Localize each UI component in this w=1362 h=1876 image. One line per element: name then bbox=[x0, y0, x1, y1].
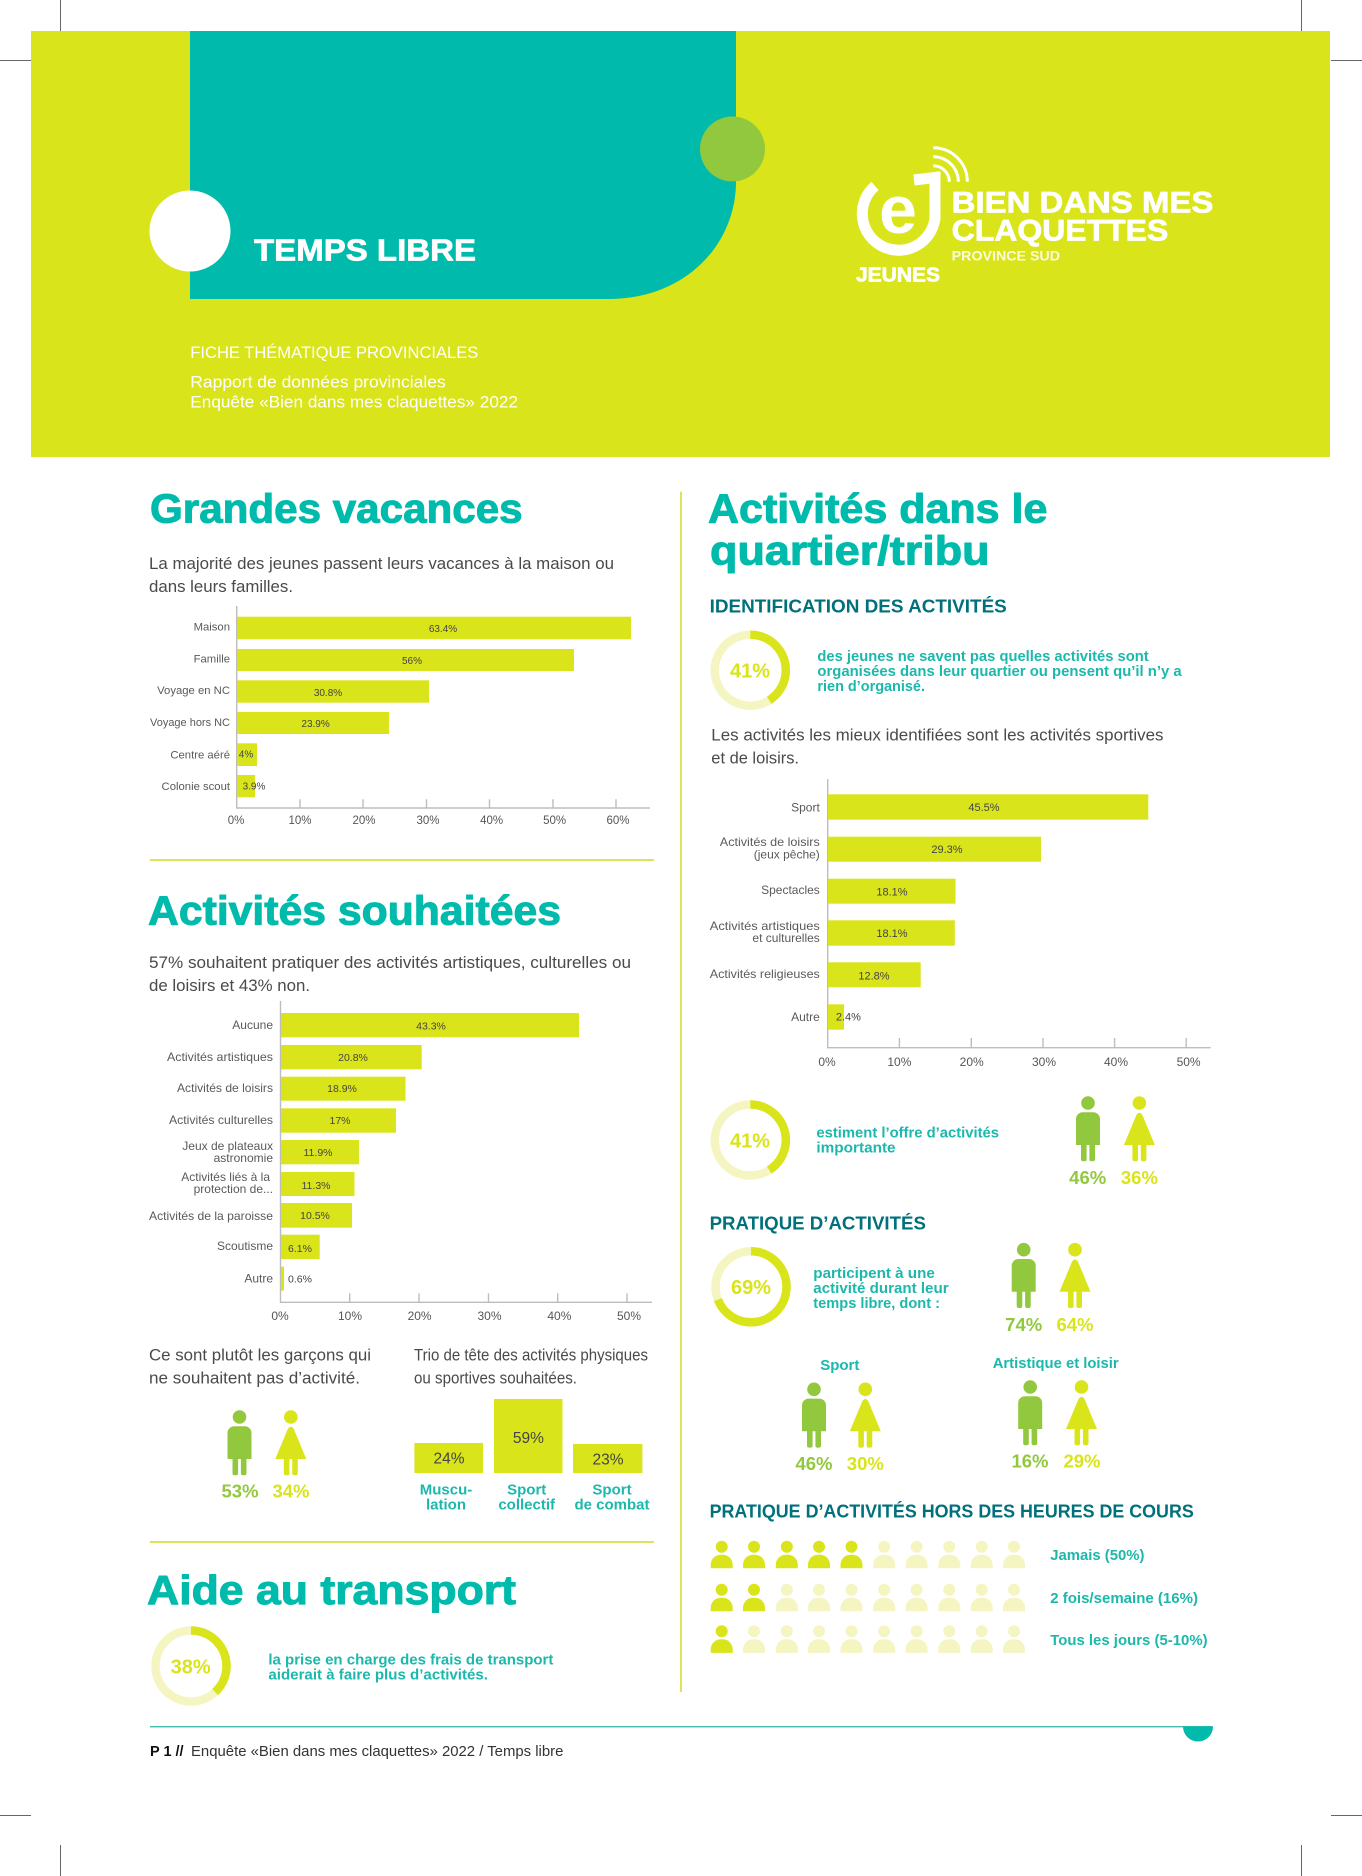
bar: sport de combat: 23% bbox=[592, 1451, 624, 1468]
bar: Activités culturelles bbox=[169, 1108, 396, 1133]
donut: 41% offre: 41% bbox=[730, 1130, 770, 1152]
trio text bbox=[414, 1346, 648, 1388]
axis labels: 20% bbox=[408, 1309, 432, 1323]
footer bbox=[150, 1726, 1213, 1760]
title: Temps libre: TEMPS LIBRE bbox=[254, 233, 476, 268]
bar: Activités de loisirs: Activités de loisirs bbox=[177, 1081, 273, 1095]
bar: Jeux de plateaux: astronomie bbox=[214, 1151, 273, 1165]
intro text: dans leurs familles. bbox=[149, 577, 293, 596]
icon: boy bbox=[228, 1410, 252, 1475]
bar: Voyage hors NC bbox=[150, 712, 389, 734]
bar: Activités de loisirs: 29.3% bbox=[931, 844, 963, 856]
bar: sport de combat: Sport bbox=[592, 1481, 632, 1498]
axis labels bbox=[228, 815, 630, 827]
bar: Voyage en NC: 30.8% bbox=[314, 688, 342, 699]
bar: sport collectif: collectif bbox=[498, 1496, 556, 1513]
callout text bbox=[268, 1651, 553, 1683]
bar: Colonie scout: Colonie scout bbox=[162, 781, 231, 793]
axis labels: 30% bbox=[477, 1309, 502, 1323]
axis labels: 10% bbox=[887, 1055, 912, 1069]
heading: Aide au transport bbox=[147, 1567, 516, 1613]
callout text: rien d’organisé. bbox=[817, 678, 925, 695]
icon: boy bbox=[1076, 1096, 1100, 1161]
axis labels: 0% bbox=[228, 815, 244, 827]
label: artistique et loisir: Artistique et loisir bbox=[993, 1355, 1119, 1372]
gender stats: sport bbox=[795, 1357, 884, 1474]
page number and source: P 1 // bbox=[150, 1744, 184, 1760]
gender stats: no activity bbox=[221, 1410, 310, 1502]
banner subtitle: Enquête «Bien dans mes claquettes» 2022 bbox=[190, 393, 518, 412]
bar chart: vacances bbox=[150, 606, 650, 827]
stat: boys: 46% bbox=[1069, 1167, 1106, 1188]
bar: Jeux de plateaux: 11.9% bbox=[304, 1147, 332, 1159]
bar: Maison bbox=[194, 617, 631, 639]
bar: musculation bbox=[414, 1443, 483, 1513]
axis labels: 60% bbox=[606, 815, 630, 827]
bar: Aucune: Aucune bbox=[232, 1018, 273, 1032]
axis labels: 20% bbox=[960, 1055, 984, 1069]
bar: Centre aéré: 4% bbox=[239, 750, 253, 761]
axis labels: 30% bbox=[1032, 1055, 1056, 1069]
bar: Centre aéré bbox=[170, 743, 257, 766]
bar: Voyage hors NC: Voyage hors NC bbox=[150, 717, 230, 729]
axis labels: 50% bbox=[543, 815, 566, 827]
bar: Activités culturelles: Activités culturelles bbox=[169, 1113, 273, 1127]
heading bbox=[708, 486, 1047, 573]
bar: sport de combat: de combat bbox=[574, 1496, 650, 1513]
bar: Famille bbox=[194, 649, 574, 671]
bar: Sport: Sport bbox=[791, 800, 820, 814]
bar: Activités de loisirs: 18.9% bbox=[327, 1083, 357, 1095]
icon: boy bbox=[1018, 1380, 1042, 1445]
white circle bbox=[150, 190, 230, 272]
panel: aide au transport bbox=[147, 1567, 553, 1702]
bar: musculation: Muscu- bbox=[420, 1481, 472, 1498]
gender stats: offre bbox=[1069, 1096, 1158, 1188]
heading: Activités dans le bbox=[708, 486, 1047, 532]
logo: e bbox=[879, 172, 917, 248]
bar: Activités artistiques bbox=[710, 919, 955, 946]
bar: Activités religieuses: Activités religieuses bbox=[710, 967, 820, 981]
panel: activités dans le quartier bbox=[708, 486, 1211, 1653]
callout text: la prise en charge des frais de transport bbox=[268, 1651, 553, 1668]
bar: Autre: Autre bbox=[791, 1010, 820, 1024]
gender text: ne souhaitent pas d’activité. bbox=[149, 1369, 360, 1388]
callout text bbox=[817, 648, 1182, 695]
bar: Activités liés: protection de... bbox=[194, 1182, 273, 1196]
callout text: aiderait à faire plus d’activités. bbox=[268, 1666, 488, 1683]
bar: Spectacles bbox=[761, 879, 956, 904]
bar: Scoutisme bbox=[217, 1235, 320, 1259]
stat: girls: 29% bbox=[1063, 1451, 1101, 1472]
bar: Activités de la paroisse: Activités de la paroisse bbox=[149, 1209, 273, 1223]
bar: Jeux de plateaux: Jeux de plateaux bbox=[182, 1139, 273, 1153]
bar: Voyage en NC: Voyage en NC bbox=[157, 685, 230, 697]
pictogram row: jamais: Jamais (50%) bbox=[1050, 1547, 1144, 1564]
bar: Colonie scout: 3.9% bbox=[243, 782, 266, 793]
icon: girl bbox=[850, 1382, 881, 1448]
stat: boys: 53% bbox=[221, 1481, 259, 1502]
bar: sport collectif: 59% bbox=[513, 1430, 544, 1447]
axis labels: 20% bbox=[352, 815, 376, 827]
callout text: des jeunes ne savent pas quelles activités sont bbox=[817, 648, 1149, 665]
bar: Scoutisme: 6.1% bbox=[288, 1243, 312, 1255]
footer half circle bbox=[1183, 1726, 1213, 1742]
bar chart: activités identifiées bbox=[710, 779, 1211, 1069]
intro text bbox=[149, 953, 631, 995]
stat: boys: 74% bbox=[1005, 1314, 1042, 1335]
bar: sport collectif bbox=[494, 1399, 562, 1513]
callout text bbox=[813, 1265, 949, 1312]
bar: Activités de la paroisse: 10.5% bbox=[300, 1210, 330, 1222]
gender text: Ce sont plutôt les garçons qui bbox=[149, 1346, 371, 1365]
bar: Activités de loisirs: Activités de loisirs bbox=[720, 835, 820, 849]
stat: girls: 64% bbox=[1056, 1314, 1094, 1335]
gender stats: pratique bbox=[1005, 1243, 1094, 1335]
stat: girls: 34% bbox=[272, 1481, 310, 1502]
axis labels: 0% bbox=[271, 1309, 289, 1323]
icon: girl bbox=[275, 1410, 306, 1475]
axis labels: 50% bbox=[617, 1309, 641, 1323]
axis labels: 30% bbox=[416, 815, 440, 827]
callout text: importante bbox=[816, 1140, 896, 1157]
callout text: activité durant leur bbox=[813, 1280, 949, 1297]
bar: Activités de loisirs: (jeux pêche) bbox=[754, 848, 820, 862]
green circle bbox=[700, 116, 765, 182]
bar: Activités de loisirs bbox=[720, 835, 1041, 862]
bar: sport de combat bbox=[573, 1444, 650, 1513]
donut: 41% offre bbox=[715, 1104, 786, 1176]
gender text bbox=[149, 1346, 371, 1388]
bar: Spectacles: Spectacles bbox=[761, 883, 820, 897]
panel: grandes vacances bbox=[149, 486, 650, 827]
bar: Aucune bbox=[232, 1013, 579, 1037]
icon: girl bbox=[1066, 1380, 1097, 1445]
bar: Activités artistiques: et culturelles bbox=[752, 931, 820, 945]
axis labels: 10% bbox=[288, 815, 312, 827]
logo: CLAQUETTES bbox=[952, 215, 1168, 248]
pictogram row: 2 fois/semaine bbox=[711, 1584, 1198, 1611]
label: sport: Sport bbox=[820, 1357, 859, 1374]
teal title panel bbox=[190, 31, 736, 299]
intro text: de loisirs et 43% non. bbox=[149, 976, 310, 995]
subheading: identification: IDENTIFICATION DES ACTIVITÉS bbox=[710, 596, 1007, 617]
bar: Activités liés: 11.3% bbox=[302, 1180, 330, 1192]
axis labels bbox=[818, 1055, 1201, 1069]
bar: Sport bbox=[791, 794, 1148, 820]
bar: Scoutisme: Scoutisme bbox=[217, 1239, 273, 1253]
banner subtitle: FICHE THÉMATIQUE PROVINCIALES bbox=[190, 343, 478, 362]
callout text bbox=[816, 1125, 999, 1157]
bar: Centre aéré: Centre aéré bbox=[170, 750, 230, 762]
axis labels: 40% bbox=[1104, 1055, 1128, 1069]
bar: Famille: Famille bbox=[194, 654, 230, 666]
callout text: temps libre, dont : bbox=[813, 1295, 940, 1312]
axis labels: 50% bbox=[1177, 1055, 1201, 1069]
callout text: organisées dans leur quartier ou pensent qu’il n’y a bbox=[817, 663, 1182, 680]
stat: boys: 16% bbox=[1011, 1451, 1049, 1472]
stat: girls: 36% bbox=[1121, 1167, 1158, 1188]
logo bbox=[856, 148, 1213, 287]
icon: boy bbox=[802, 1382, 826, 1448]
bar: musculation: lation bbox=[426, 1496, 466, 1513]
axis labels: 0% bbox=[818, 1055, 836, 1069]
bar: Aucune: 43.3% bbox=[416, 1021, 446, 1033]
bar: Activités de loisirs bbox=[177, 1077, 406, 1101]
bar: Autre: Autre bbox=[244, 1272, 273, 1286]
header banner bbox=[31, 31, 1330, 457]
pictogram row: tous les jours: Tous les jours (5-10%) bbox=[1050, 1632, 1208, 1649]
page number and source: Enquête «Bien dans mes claquettes» 2022 / Temps libre bbox=[191, 1744, 563, 1760]
pictogram row: jamais bbox=[711, 1541, 1144, 1568]
intro text: Les activités les mieux identifiées sont les activités sportives bbox=[711, 726, 1164, 745]
icon: girl bbox=[1124, 1096, 1155, 1161]
bar: Activités liés: Activités liés à la bbox=[181, 1170, 270, 1184]
intro text bbox=[149, 554, 614, 596]
bar: Famille: 56% bbox=[402, 656, 422, 667]
pictogram row: 2 fois/semaine: 2 fois/semaine (16%) bbox=[1050, 1590, 1198, 1607]
bar: Autre bbox=[244, 1267, 312, 1291]
donut: 38% bbox=[156, 1630, 226, 1702]
bar: musculation: 24% bbox=[433, 1450, 465, 1467]
bar: Activités religieuses: 12.8% bbox=[858, 971, 890, 983]
donut: 41% bbox=[715, 635, 786, 706]
trio text: ou sportives souhaitées. bbox=[414, 1369, 577, 1388]
donut: 41%: 41% bbox=[730, 660, 770, 682]
intro text bbox=[711, 726, 1164, 768]
heading: Activités souhaitées bbox=[148, 887, 561, 933]
bar: Activités liés bbox=[181, 1170, 354, 1196]
donut: 38%: 38% bbox=[171, 1656, 211, 1678]
gender stats: artistique et loisir bbox=[993, 1355, 1119, 1472]
panel: activités souhaitées bbox=[148, 887, 652, 1513]
subheading: pratique: PRATIQUE D’ACTIVITÉS bbox=[710, 1213, 926, 1234]
bar: Sport: 45.5% bbox=[968, 802, 1000, 814]
donut: 69%: 69% bbox=[731, 1277, 771, 1299]
stat: girls: 30% bbox=[847, 1453, 884, 1474]
bar: Activités artistiques: Activités artistiques bbox=[167, 1050, 273, 1064]
bar: Colonie scout bbox=[162, 775, 266, 797]
donut: 69% bbox=[716, 1251, 786, 1322]
banner subtitle: Rapport de données provinciales bbox=[190, 373, 446, 392]
callout text: participent à une bbox=[813, 1265, 935, 1282]
bar: Activités religieuses bbox=[710, 962, 921, 987]
bar: Activités culturelles: 17% bbox=[329, 1115, 351, 1127]
bar: Autre: 0.6% bbox=[288, 1274, 312, 1286]
bar: Spectacles: 18.1% bbox=[876, 887, 908, 899]
bar: Autre: 2.4% bbox=[836, 1012, 861, 1024]
bar: Jeux de plateaux bbox=[182, 1139, 359, 1165]
intro text: La majorité des jeunes passent leurs vacances à la maison ou bbox=[149, 554, 614, 573]
logo: JEUNES bbox=[856, 265, 940, 287]
bar: Voyage en NC bbox=[157, 680, 429, 703]
stat: boys: 46% bbox=[795, 1453, 833, 1474]
icon: boy bbox=[1012, 1243, 1036, 1308]
axis labels: 10% bbox=[338, 1309, 362, 1323]
bar: Activités artistiques bbox=[167, 1045, 422, 1069]
trio text: Trio de tête des activités physiques bbox=[414, 1346, 648, 1365]
bar: Activités artistiques: Activités artistiques bbox=[710, 919, 820, 933]
heading: quartier/tribu bbox=[710, 527, 990, 573]
bar: sport collectif: Sport bbox=[507, 1481, 546, 1498]
bar: Maison: 63.4% bbox=[429, 624, 457, 635]
banner subtitle bbox=[190, 343, 518, 412]
logo: BIEN DANS MES bbox=[952, 186, 1213, 219]
trio bar chart bbox=[414, 1399, 650, 1513]
logo: PROVINCE SUD bbox=[952, 248, 1060, 264]
pictogram row: tous les jours bbox=[711, 1625, 1208, 1653]
intro text: 57% souhaitent pratiquer des activités artistiques, culturelles ou bbox=[149, 953, 631, 972]
bar: Voyage hors NC: 23.9% bbox=[301, 719, 330, 730]
axis labels bbox=[271, 1309, 641, 1323]
icon: girl bbox=[1060, 1243, 1090, 1308]
intro text: et de loisirs. bbox=[711, 749, 799, 768]
bar: Activités de la paroisse bbox=[149, 1203, 352, 1228]
axis labels: 40% bbox=[480, 815, 503, 827]
heading: Grandes vacances bbox=[150, 486, 523, 532]
bar: Maison: Maison bbox=[194, 622, 230, 634]
subheading: hors des heures de cours: PRATIQUE D’ACTIVITÉS HORS DES HEURES DE COURS bbox=[710, 1501, 1194, 1522]
bar: Activités artistiques: 20.8% bbox=[338, 1052, 368, 1064]
callout text: estiment l’offre d’activités bbox=[816, 1125, 999, 1142]
axis labels: 40% bbox=[547, 1309, 572, 1323]
bar: Activités artistiques: 18.1% bbox=[876, 928, 908, 940]
bar: Autre bbox=[791, 1004, 861, 1030]
bar chart: activités souhaitées bbox=[149, 1001, 652, 1323]
